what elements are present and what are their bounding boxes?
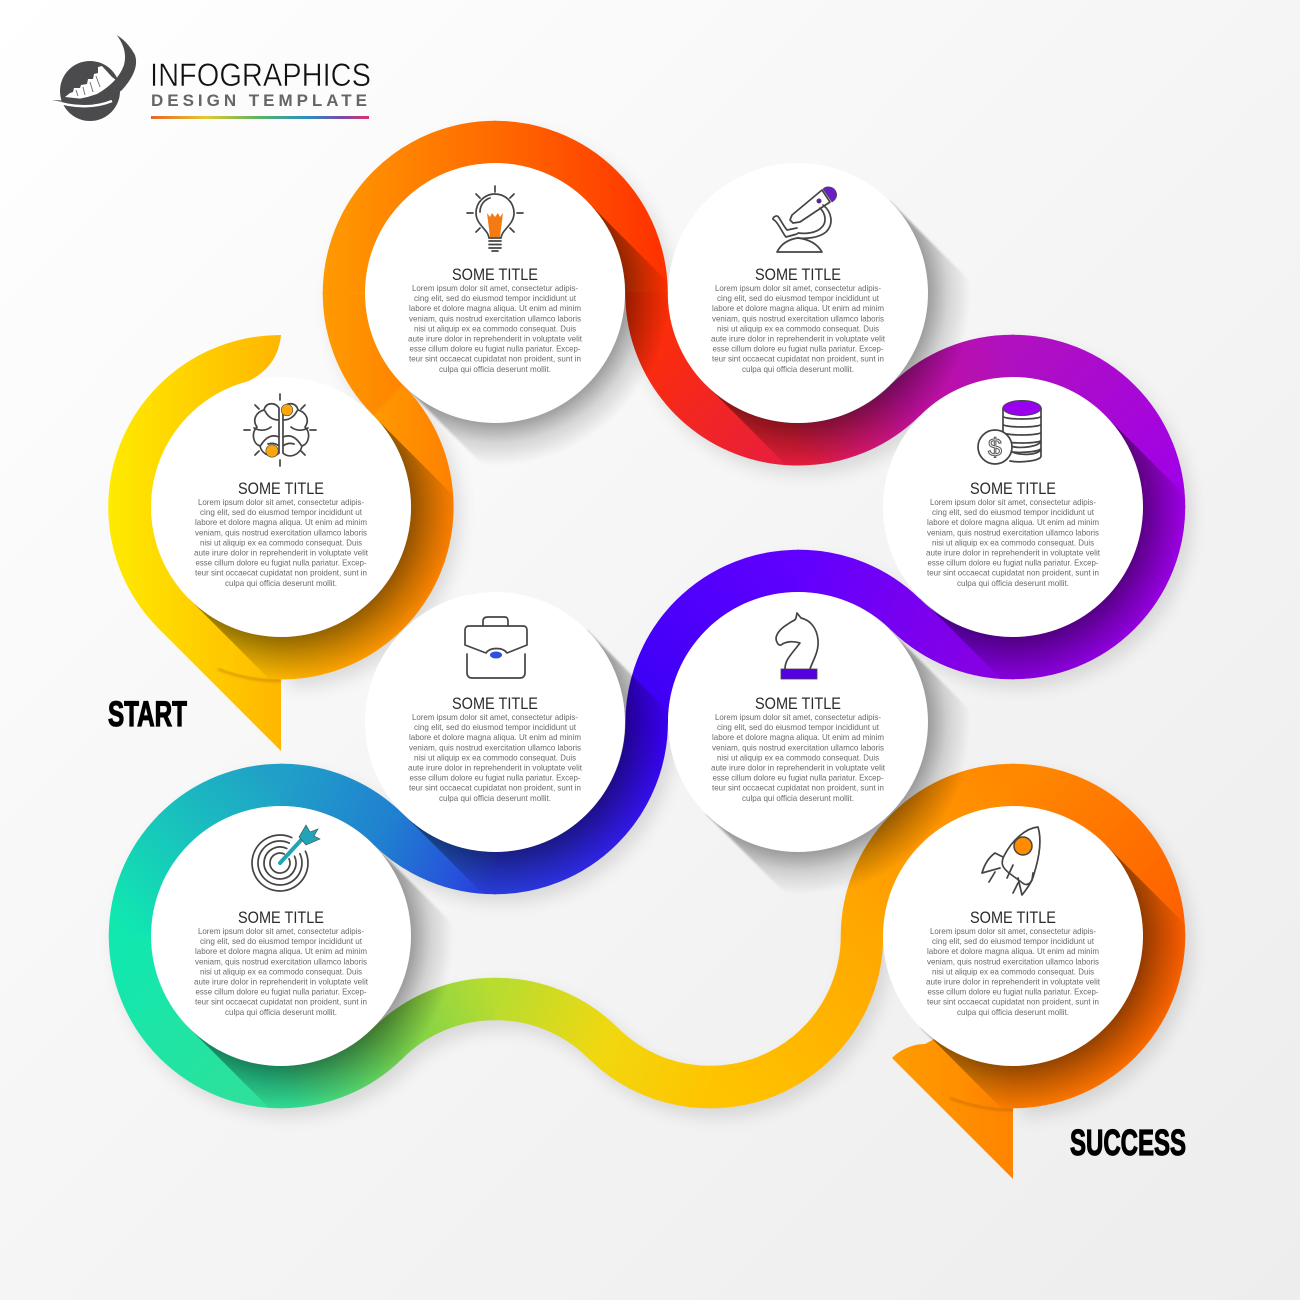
body text: aute irure dolor in reprehenderit in voluptate velit xyxy=(711,762,886,772)
panel: step 6 briefcase xyxy=(365,592,625,852)
body text: culpa qui officia deserunt mollit. xyxy=(742,793,854,803)
body text: aute irure dolor in reprehenderit in voluptate velit xyxy=(408,762,583,772)
icon: chess knight xyxy=(776,613,818,679)
rainbow underline xyxy=(151,116,369,119)
body text xyxy=(711,712,886,803)
body text: cing elit, sed do eiusmod tempor incididunt ut xyxy=(717,293,880,303)
icon: microscope xyxy=(773,187,837,252)
title: SOME TITLE xyxy=(970,909,1056,927)
icon: brain xyxy=(244,394,316,466)
ribbon soft shadow xyxy=(137,151,1171,1096)
body text: esse cillum dolore eu fugiat nulla pariatur. Excep- xyxy=(410,773,581,783)
label: SUCCESS: SUCCESS xyxy=(1070,1122,1186,1163)
body text: nisi ut aliquip ex ea commodo consequat. Duis xyxy=(932,966,1094,976)
body text: Lorem ipsum dolor sit amet, consectetur adipis- xyxy=(715,283,881,293)
body text: teur sint occaecat cupidatat non proident, sunt in xyxy=(927,997,1099,1007)
body text: esse cillum dolore eu fugiat nulla pariatur. Excep- xyxy=(410,344,581,354)
white disc xyxy=(151,806,411,1066)
body text: veniam, quis nostrud exercitation ullamco laboris xyxy=(409,313,581,323)
body text: veniam, quis nostrud exercitation ullamco laboris xyxy=(195,527,367,537)
icon: target with arrow xyxy=(252,825,320,891)
body text: Lorem ipsum dolor sit amet, consectetur adipis- xyxy=(198,497,364,507)
ribbon segments from yellow to orange xyxy=(130,142,1164,1108)
title: SOME TITLE xyxy=(755,695,841,713)
header: logo and title block xyxy=(50,35,371,121)
body text: esse cillum dolore eu fugiat nulla pariatur. Excep- xyxy=(928,558,1099,568)
body text: nisi ut aliquip ex ea commodo consequat. Duis xyxy=(200,537,362,547)
body text: nisi ut aliquip ex ea commodo consequat. Duis xyxy=(200,966,362,976)
body text xyxy=(711,283,886,374)
body text: veniam, quis nostrud exercitation ullamco laboris xyxy=(409,742,581,752)
body text: culpa qui officia deserunt mollit. xyxy=(957,1007,1069,1017)
body text: teur sint occaecat cupidatat non proident, sunt in xyxy=(712,783,884,793)
body text: labore et dolore magna aliqua. Ut enim ad minim xyxy=(927,946,1099,956)
circle background shadows xyxy=(189,201,1231,1154)
white disc xyxy=(151,377,411,637)
body text: culpa qui officia deserunt mollit. xyxy=(439,793,551,803)
body text: culpa qui officia deserunt mollit. xyxy=(742,364,854,374)
body text: cing elit, sed do eiusmod tempor incididunt ut xyxy=(932,507,1095,517)
body text: cing elit, sed do eiusmod tempor incididunt ut xyxy=(200,936,363,946)
body text: culpa qui officia deserunt mollit. xyxy=(957,578,1069,588)
start arrow tail xyxy=(108,335,281,751)
title: SOME TITLE xyxy=(452,266,538,284)
body text: cing elit, sed do eiusmod tempor incididunt ut xyxy=(200,507,363,517)
body text xyxy=(408,712,583,803)
body text: nisi ut aliquip ex ea commodo consequat. Duis xyxy=(932,537,1094,547)
icon: coin stack: $ xyxy=(988,434,1002,462)
body text: aute irure dolor in reprehenderit in voluptate velit xyxy=(408,334,583,344)
body text xyxy=(926,497,1101,588)
icon: logo mark xyxy=(50,35,136,121)
body text: culpa qui officia deserunt mollit. xyxy=(225,578,337,588)
body text: cing elit, sed do eiusmod tempor incididunt ut xyxy=(414,293,577,303)
body text: culpa qui officia deserunt mollit. xyxy=(439,364,551,374)
body text xyxy=(408,283,583,374)
title: SOME TITLE xyxy=(970,480,1056,498)
title: SOME TITLE xyxy=(452,695,538,713)
body text: teur sint occaecat cupidatat non proident, sunt in xyxy=(195,568,367,578)
label: START: START xyxy=(108,695,187,734)
body text: veniam, quis nostrud exercitation ullamco laboris xyxy=(195,956,367,966)
body text: aute irure dolor in reprehenderit in voluptate velit xyxy=(711,334,886,344)
body text: Lorem ipsum dolor sit amet, consectetur adipis- xyxy=(930,926,1096,936)
body text: teur sint occaecat cupidatat non proident, sunt in xyxy=(712,354,884,364)
body text: aute irure dolor in reprehenderit in voluptate velit xyxy=(194,548,369,558)
winding rainbow ribbon xyxy=(108,142,1231,1179)
body text: teur sint occaecat cupidatat non proident, sunt in xyxy=(195,997,367,1007)
panel: step 5 chess knight xyxy=(668,592,928,852)
body text: esse cillum dolore eu fugiat nulla pariatur. Excep- xyxy=(196,987,367,997)
body text: teur sint occaecat cupidatat non proident, sunt in xyxy=(409,354,581,364)
title: SOME TITLE xyxy=(238,480,324,498)
body text: nisi ut aliquip ex ea commodo consequat. Duis xyxy=(414,752,576,762)
body text: nisi ut aliquip ex ea commodo consequat. Duis xyxy=(717,323,879,333)
body text: cing elit, sed do eiusmod tempor incididunt ut xyxy=(717,722,880,732)
body text: aute irure dolor in reprehenderit in voluptate velit xyxy=(926,976,1101,986)
white disc xyxy=(883,806,1143,1066)
icon: rocket xyxy=(982,827,1040,895)
icon: coin stack xyxy=(978,400,1041,464)
body text: veniam, quis nostrud exercitation ullamco laboris xyxy=(712,313,884,323)
body text: veniam, quis nostrud exercitation ullamco laboris xyxy=(712,742,884,752)
body text: Lorem ipsum dolor sit amet, consectetur adipis- xyxy=(715,712,881,722)
body text xyxy=(926,926,1101,1017)
panel: step 8 rocket xyxy=(883,806,1143,1066)
icon: briefcase xyxy=(465,617,527,678)
panel: step 7 target xyxy=(151,806,411,1066)
white disc xyxy=(883,377,1143,637)
body text: aute irure dolor in reprehenderit in voluptate velit xyxy=(194,976,369,986)
white disc xyxy=(365,163,625,423)
body text: esse cillum dolore eu fugiat nulla pariatur. Excep- xyxy=(712,344,884,354)
title: SOME TITLE xyxy=(238,909,324,927)
body text: teur sint occaecat cupidatat non proident, sunt in xyxy=(409,783,581,793)
panel: step 2 light bulb xyxy=(365,163,625,423)
white disc xyxy=(365,592,625,852)
seam patches where ribbon segments meet xyxy=(130,142,1164,1087)
crescent shadows on the tails xyxy=(218,669,1013,1110)
body text: labore et dolore magna aliqua. Ut enim ad minim xyxy=(409,303,581,313)
body text: veniam, quis nostrud exercitation ullamco laboris xyxy=(927,527,1099,537)
body text: Lorem ipsum dolor sit amet, consectetur adipis- xyxy=(198,926,364,936)
body text: esse cillum dolore eu fugiat nulla pariatur. Excep- xyxy=(712,773,884,783)
body text: labore et dolore magna aliqua. Ut enim ad minim xyxy=(927,517,1099,527)
body text: Lorem ipsum dolor sit amet, consectetur adipis- xyxy=(930,497,1096,507)
subheading: DESIGN TEMPLATE: DESIGN TEMPLATE xyxy=(151,91,367,110)
circle shadows on ribbon xyxy=(189,201,1231,1154)
body text: Lorem ipsum dolor sit amet, consectetur adipis- xyxy=(412,712,578,722)
body text: labore et dolore magna aliqua. Ut enim ad minim xyxy=(195,517,367,527)
white disc xyxy=(668,592,928,852)
panel: step 3 microscope xyxy=(668,163,928,423)
body text xyxy=(194,497,369,588)
body text: esse cillum dolore eu fugiat nulla pariatur. Excep- xyxy=(196,558,367,568)
body text: teur sint occaecat cupidatat non proident, sunt in xyxy=(927,568,1099,578)
body text: labore et dolore magna aliqua. Ut enim ad minim xyxy=(712,732,884,742)
body text: nisi ut aliquip ex ea commodo consequat. Duis xyxy=(414,323,576,333)
body text: labore et dolore magna aliqua. Ut enim ad minim xyxy=(195,946,367,956)
body text: labore et dolore magna aliqua. Ut enim ad minim xyxy=(409,732,581,742)
body text: nisi ut aliquip ex ea commodo consequat. Duis xyxy=(717,752,879,762)
panel: step 1 brain xyxy=(151,377,411,637)
white disc xyxy=(668,163,928,423)
body text: veniam, quis nostrud exercitation ullamco laboris xyxy=(927,956,1099,966)
body text: aute irure dolor in reprehenderit in voluptate velit xyxy=(926,548,1101,558)
body text: cing elit, sed do eiusmod tempor incididunt ut xyxy=(414,722,577,732)
icon: light bulb xyxy=(467,186,523,251)
heading: INFOGRAPHICS: INFOGRAPHICS xyxy=(150,57,371,93)
title: SOME TITLE xyxy=(755,266,841,284)
body text xyxy=(194,926,369,1017)
body text: cing elit, sed do eiusmod tempor incididunt ut xyxy=(932,936,1095,946)
body text: culpa qui officia deserunt mollit. xyxy=(225,1007,337,1017)
body text: Lorem ipsum dolor sit amet, consectetur adipis- xyxy=(412,283,578,293)
body text: labore et dolore magna aliqua. Ut enim ad minim xyxy=(712,303,884,313)
panel: step 4 coins xyxy=(883,377,1143,637)
body text: esse cillum dolore eu fugiat nulla pariatur. Excep- xyxy=(928,987,1099,997)
success arrow tail xyxy=(892,1020,1013,1179)
